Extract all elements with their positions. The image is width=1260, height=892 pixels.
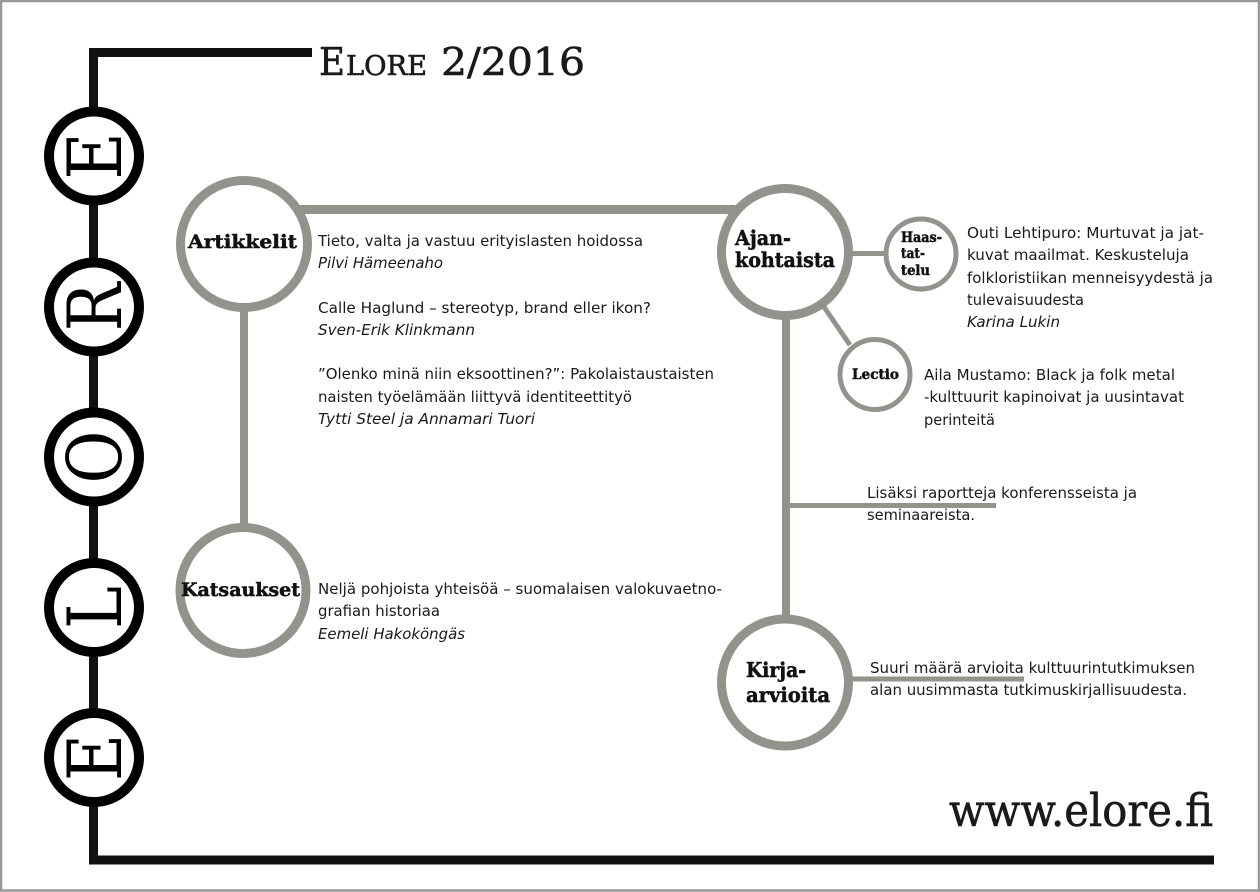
panel: Lectio: Lectio xyxy=(852,367,899,383)
text: Haastattelu: folkloristiikan menneisyydestä ja xyxy=(967,270,1213,287)
text: Haastattelu: kuvat maailmat. Keskusteluja xyxy=(967,247,1189,264)
text: Artikkelit articles: Calle Haglund – stereotyp, brand eller ikon? xyxy=(318,300,651,317)
panel: Haastattelu: tat- xyxy=(901,246,925,262)
text: Artikkelit articles xyxy=(317,233,714,428)
text: Kirja-arvioita: alan uusimmasta tutkimuskirjallisuudesta. xyxy=(870,682,1187,699)
panel: Artikkelit: Artikkelit xyxy=(187,232,297,253)
text: Katsaukset article: Eemeli Hakoköngäs xyxy=(318,626,465,643)
title: E xyxy=(319,40,345,84)
panel: Haastattelu: Haas- xyxy=(901,230,942,246)
panel: Kirja-arvioita: arvioita xyxy=(746,683,830,707)
panel: Haastattelu xyxy=(886,219,956,289)
text: reports xyxy=(867,485,1137,524)
text: Lectio: Aila Mustamo: Black ja folk metal xyxy=(924,367,1175,384)
panel: Lectio xyxy=(840,340,910,410)
text: Kirja-arvioita: Suuri määrä arvioita kulttuurintutkimuksen xyxy=(870,660,1195,677)
text: Katsaukset article xyxy=(318,581,722,643)
text: reports: Lisäksi raportteja konferensseista ja xyxy=(867,485,1137,502)
letter circle L xyxy=(49,563,139,652)
panel: Ajankohtaista: Ajan- xyxy=(734,226,791,250)
panel: Haastattelu: telu xyxy=(901,263,930,279)
letter circle E: E xyxy=(52,132,139,180)
text: Artikkelit articles: naisten työelämään liittyvä identiteettityö xyxy=(318,389,632,406)
letter circle O: O xyxy=(52,431,139,483)
letter circle E xyxy=(49,112,139,200)
text: Haastattelu: tulevaisuudesta xyxy=(967,292,1084,309)
text: Haastattelu: Karina Lukin xyxy=(967,314,1060,331)
panel: Ajankohtaista xyxy=(722,188,848,316)
panel: Ajankohtaista: kohtaista xyxy=(735,248,835,272)
letter circle R xyxy=(49,262,139,352)
text: Artikkelit articles: ”Olenko minä niin eksoottinen?”: Pakolaistaustaisten xyxy=(318,366,714,383)
website url: www.elore.fi xyxy=(949,784,1213,837)
text: Lectio: perinteitä xyxy=(924,412,995,429)
panel: Katsaukset: Katsaukset xyxy=(181,580,300,601)
text: Lectio: -kulttuurit kapinoivat ja uusintavat xyxy=(924,389,1184,406)
title: LORE xyxy=(346,51,427,82)
text: Katsaukset article: Neljä pohjoista yhteisöä – suomalaisen valokuvaetno- xyxy=(318,581,722,598)
panel: Kirja-arvioita: Kirja- xyxy=(746,658,806,682)
text: reports: seminaareista. xyxy=(867,507,975,524)
text: Artikkelit articles: Tytti Steel ja Annamari Tuori xyxy=(318,411,536,428)
letter circle E: E xyxy=(52,734,139,781)
panel: Katsaukset xyxy=(180,528,306,654)
panel: Artikkelit xyxy=(180,180,308,308)
text: Katsaukset article: grafian historiaa xyxy=(318,603,440,620)
letter circle R: R xyxy=(52,281,139,331)
text: Artikkelit articles: Sven-Erik Klinkmann xyxy=(318,322,475,339)
text: Haastattelu xyxy=(967,225,1213,331)
text: Lectio xyxy=(924,367,1184,429)
text: Artikkelit articles: Pilvi Hämeenaho xyxy=(318,255,443,272)
title xyxy=(319,40,585,84)
connector lines xyxy=(244,210,1024,679)
text: Kirja-arvioita xyxy=(870,660,1195,699)
letter circle L: L xyxy=(52,586,139,629)
letter circle O xyxy=(49,412,139,502)
panel: Kirja-arvioita xyxy=(722,619,848,746)
title: 2/2016 xyxy=(441,40,585,84)
letter circle E xyxy=(49,713,139,802)
text: Artikkelit articles: Tieto, valta ja vastuu erityislasten hoidossa xyxy=(317,233,643,250)
text: Haastattelu: Outi Lehtipuro: Murtuvat ja jat- xyxy=(967,225,1204,242)
